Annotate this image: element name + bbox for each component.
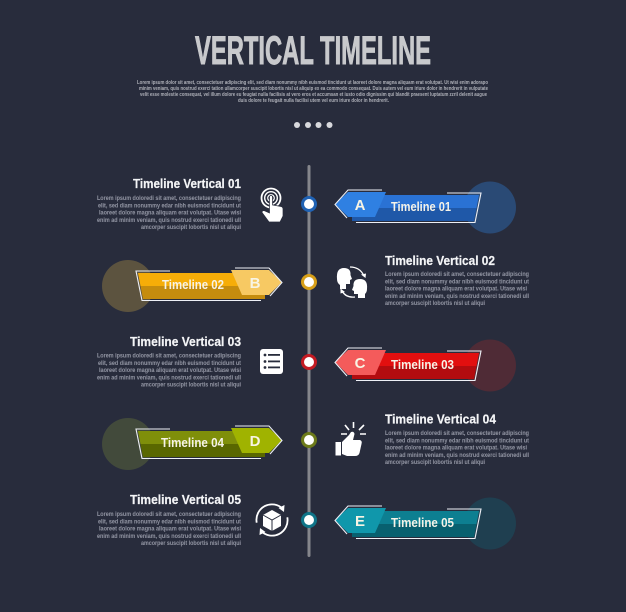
- body text 04: amcorper suscipit lobortis nisl ut aliqui: [385, 459, 485, 466]
- body text 03: Lorem ipsum doloredi sit amet, consectetuer adipiscing: [97, 352, 241, 360]
- banner C: [335, 340, 516, 392]
- body text 02: enim ad minim veniam, quis nostrud exerci tationedi ull: [385, 293, 529, 300]
- body text 02: Lorem ipsum doloredi sit amet, consectetuer adipiscing: [385, 271, 529, 278]
- panel: timeline vertical 02: [385, 254, 530, 307]
- icon: checklist: [260, 349, 283, 374]
- glow circle B: [102, 260, 154, 312]
- glow circle E: [464, 498, 516, 550]
- title: VERTICAL TIMELINE: [195, 29, 431, 73]
- heading 03: Timeline Vertical 03: [130, 335, 241, 349]
- letter E: E: [355, 513, 365, 530]
- heading 05: Timeline Vertical 05: [130, 493, 241, 507]
- banner label 03: Timeline 03: [391, 358, 454, 372]
- panel: timeline vertical 01: [97, 177, 242, 231]
- body text 05: enim ad minim veniam, quis nostrud exerci tationedi ull: [97, 533, 241, 540]
- body text 03: elit, sed diam nonummy edar nibh euismod tincidunt ut: [98, 360, 242, 367]
- panel: timeline vertical 05: [97, 493, 242, 547]
- heading 04: Timeline Vertical 04: [385, 412, 496, 426]
- intro paragraph: duis dolore te feugait nulla facilisi utem vel eum iriure dolor in hendrerit.: [238, 98, 389, 104]
- body text 04: laoreet dolore magna aliquam erat volutpat. Utase wisi: [385, 445, 527, 452]
- body text 01: laoreet dolore magna aliquam erat volutpat. Utase wisi: [99, 210, 241, 217]
- banner E: [335, 498, 516, 550]
- body text 01: elit, sed diam nonummy edar nibh euismod tincidunt ut: [98, 202, 242, 209]
- intro paragraph: velit esse molestie consequat, vel illum dolore eu feugiat nulla facilisis at vero eros et accumsan et iusto odio dignissim qui blandit praesent luptatum zzril delenit augue: [140, 92, 487, 98]
- body text 05: amcorper suscipit lobortis nisl ut aliqui: [141, 540, 241, 547]
- letter B: B: [250, 275, 261, 292]
- panel: timeline vertical 03: [97, 335, 242, 389]
- body text 05: elit, sed diam nonummy edar nibh euismod tincidunt ut: [98, 518, 242, 525]
- intro paragraph: minim veniam, quis nostrud exerci tation ullamcorper suscipit lobortis nisl ut aliquip ex ea commodo consequat. Duis autem vel eum iriure dolor in hendrerit in vulputate: [139, 86, 488, 92]
- timeline nodes: [302, 198, 316, 526]
- icon: touch hand: [262, 188, 283, 222]
- body text 05: Lorem ipsum doloredi sit amet, consectetuer adipiscing: [97, 511, 241, 518]
- icon: exchanging heads: [337, 267, 367, 298]
- body text 04: Lorem ipsum doloredi sit amet, consectetuer adipiscing: [385, 430, 529, 437]
- body text 04: elit, sed diam nonummy edar nibh euismod tincidunt ut: [385, 437, 530, 444]
- glow circle A: [464, 182, 516, 234]
- heading 02: Timeline Vertical 02: [385, 254, 495, 268]
- letter C: C: [355, 355, 366, 372]
- banner label 04: Timeline 04: [161, 436, 224, 450]
- banner label 02: Timeline 02: [162, 278, 224, 292]
- body text 02: elit, sed diam nonummy edar nibh euismod tincidunt ut: [385, 278, 530, 285]
- body text 04: [385, 430, 530, 466]
- banner A: [335, 182, 516, 234]
- glow circle C: [464, 340, 516, 392]
- body text 01: Lorem ipsum doloredi sit amet, consectetuer adipiscing: [97, 195, 241, 202]
- letter D: D: [250, 433, 261, 450]
- body text 03: enim ad minim veniam, quis nostrud exerci tationedi ull: [97, 374, 241, 381]
- intro paragraph: Lorem ipsum dolor sit amet, consectetuer adipiscing elit, sed diam nonummy nibh euismod tincidunt ut laoreet dolore magna aliquam erat volutpat. Ut wisi enim adorapo: [137, 80, 488, 86]
- banner label 05: Timeline 05: [391, 516, 454, 530]
- body text 05: laoreet dolore magna aliquam erat volutpat. Utase wisi: [99, 526, 241, 533]
- banner label 01: Timeline 01: [391, 200, 451, 214]
- icon: thumbs up: [336, 422, 366, 456]
- body text 03: laoreet dolore magna aliquam erat volutpat. Utase wisi: [99, 367, 241, 374]
- body text 02: [385, 271, 530, 307]
- body text 03: [97, 352, 242, 389]
- body text 01: amcorper suscipit lobortis nisl ut aliqui: [141, 224, 241, 231]
- glow circle D: [102, 418, 154, 470]
- heading 01: Timeline Vertical 01: [133, 177, 241, 191]
- body text 01: enim ad minim veniam, quis nostrud exerci tationedi ull: [97, 217, 241, 224]
- icon: rotating cube: [256, 504, 288, 536]
- body text 04: enim ad minim veniam, quis nostrud exerci tationedi ull: [385, 452, 529, 459]
- intro paragraph: [137, 80, 488, 104]
- body text 02: laoreet dolore magna aliquam erat volutpat. Utase wisi: [385, 286, 527, 293]
- banner B: [102, 260, 282, 312]
- banner D: [102, 418, 282, 470]
- body text 03: amcorper suscipit lobortis nisl ut aliqui: [141, 382, 241, 389]
- letter A: A: [355, 197, 366, 214]
- body text 02: amcorper suscipit lobortis nisl ut aliqui: [385, 300, 485, 307]
- pagination dots: [294, 122, 332, 128]
- body text 05: [97, 511, 242, 547]
- timeline axis: [308, 165, 310, 557]
- panel: timeline vertical 04: [385, 412, 530, 466]
- body text 01: [97, 195, 242, 231]
